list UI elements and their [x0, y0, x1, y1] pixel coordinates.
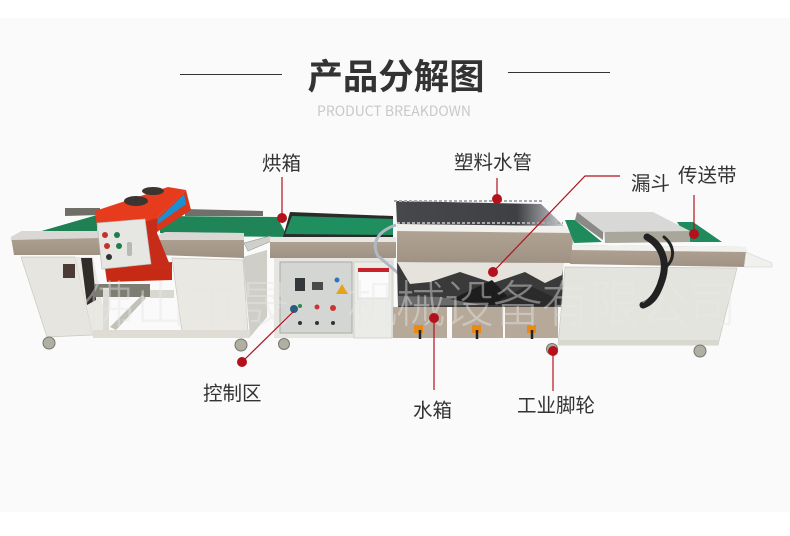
callout: 漏斗: 漏斗	[631, 167, 670, 196]
red oven housing	[95, 187, 191, 282]
callout: 烘箱	[262, 147, 301, 223]
left conveyor unit	[11, 208, 288, 351]
callout: 传送带: 传送带	[678, 159, 737, 188]
callout: 传送带	[678, 159, 737, 239]
callout: 塑料水管	[454, 146, 532, 204]
callout: 控制区: 控制区	[203, 377, 262, 406]
title rule left	[180, 74, 282, 75]
watermark: 机械设备有限公司	[347, 277, 737, 333]
callout: 工业脚轮	[517, 346, 595, 418]
drying box	[394, 201, 574, 263]
water tanks	[393, 307, 558, 339]
callout: 控制区	[203, 311, 294, 406]
warning door	[354, 262, 392, 338]
subtitle: PRODUCT BREAKDOWN	[317, 101, 471, 121]
watermark	[84, 277, 737, 333]
oven control box	[97, 219, 151, 269]
machine illustration	[11, 187, 772, 357]
callout: 漏斗	[488, 167, 670, 277]
control panel	[280, 262, 352, 333]
callout: 烘箱: 烘箱	[262, 147, 301, 176]
title block	[180, 49, 610, 121]
watermark: 佛山市晟	[84, 277, 289, 333]
water hose	[375, 225, 398, 273]
callout: 塑料水管: 塑料水管	[454, 146, 532, 175]
funnel and hopper	[397, 262, 564, 307]
black cable hoses	[643, 237, 673, 305]
middle conveyor unit	[270, 212, 396, 350]
callout: 水箱: 水箱	[413, 394, 452, 423]
right conveyor unit	[546, 212, 772, 357]
callout: 水箱	[413, 313, 452, 423]
title rule right	[508, 72, 610, 73]
callout: 工业脚轮: 工业脚轮	[517, 389, 595, 418]
title: 产品分解图	[308, 49, 484, 100]
